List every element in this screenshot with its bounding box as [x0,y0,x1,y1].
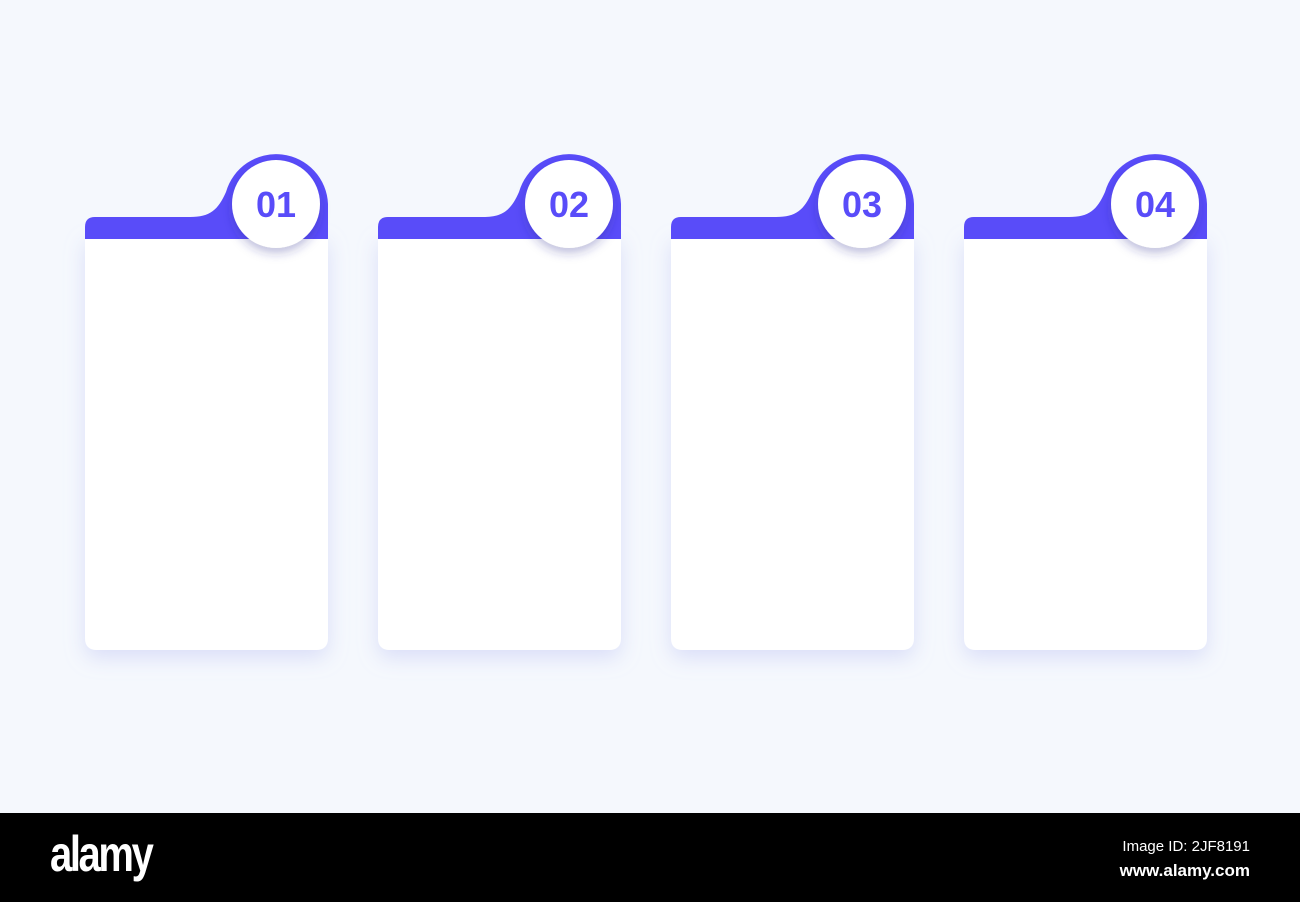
card 1 [85,154,328,650]
footer id text [1120,838,1250,880]
footer id text: Image ID: 2JF8191 [1122,838,1250,855]
card 2 [378,154,621,650]
footer logo: alamy [50,826,151,882]
footer id text: www.alamy.com [1120,861,1250,880]
number 04: 04 [1135,184,1175,225]
number 01: 01 [256,184,296,225]
footer bar [0,813,1300,902]
card 4 [964,154,1207,650]
number 02: 02 [549,184,589,225]
card 3 [671,154,914,650]
number 03: 03 [842,184,882,225]
